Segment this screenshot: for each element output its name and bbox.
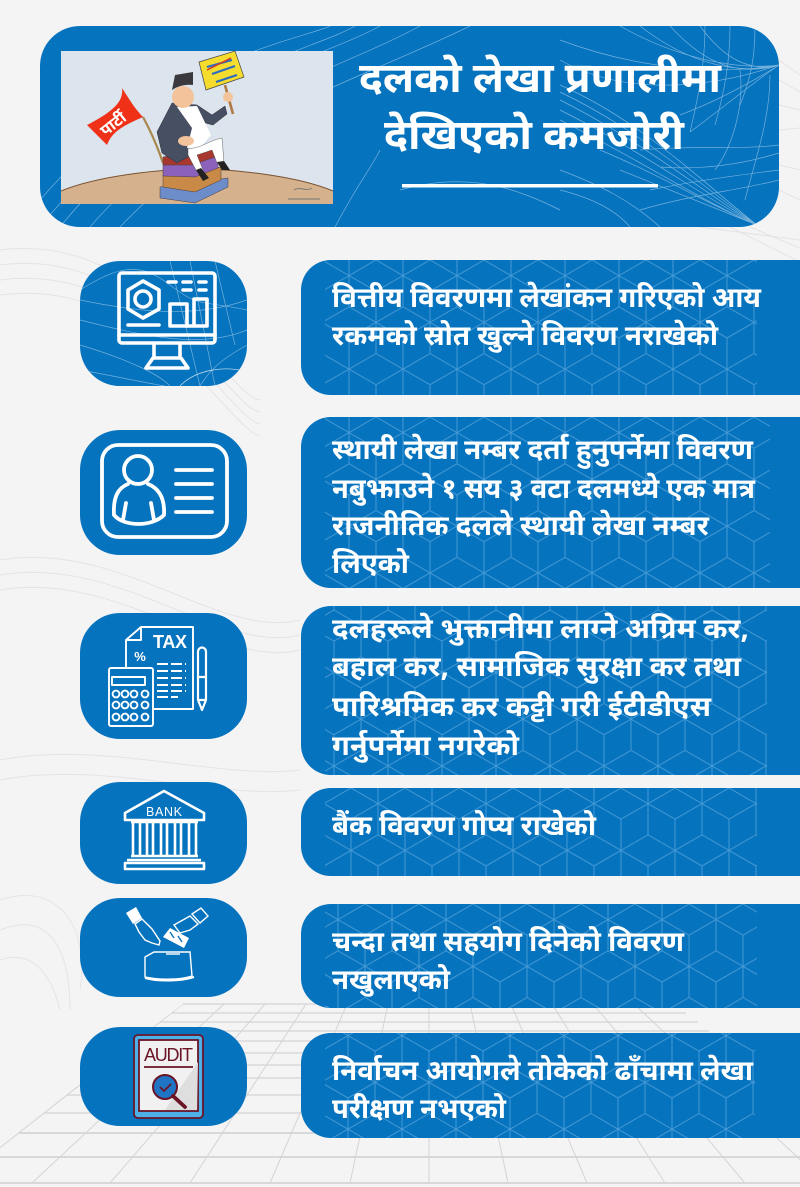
text panel 4: बैंक विवरण गोप्य राखेको (332, 808, 597, 847)
text panel 3: बहाल कर, सामाजिक सुरक्षा कर तथा (332, 650, 742, 688)
icon panel: bank (80, 782, 247, 884)
icon: tax form, calculator and pen (109, 627, 206, 726)
floor grid (0, 1004, 800, 1183)
text panel 5: नखुलाएको (332, 963, 451, 1001)
icon: audit report: AUDIT (144, 1045, 193, 1065)
text panel 6 (301, 1033, 800, 1138)
icon panel: monitor (80, 261, 247, 386)
text panel 2: राजनीतिक दलले स्थायी लेखा नम्बर (332, 508, 710, 547)
red flag: पार्टी (96, 107, 133, 142)
text panel 1: रकमको स्रोत खुल्ने विवरण नराखेको (332, 318, 719, 357)
icon panel: ID card (80, 430, 247, 555)
text panel 5 (301, 904, 800, 1008)
stack of books (160, 148, 228, 203)
icon: bank building (125, 791, 204, 869)
text panel 2: लिएको (332, 547, 410, 585)
text panel 2: स्थायी लेखा नम्बर दर्ता हुनुपर्नेमा विवरण (332, 432, 753, 471)
text panel 3: गर्नुपर्नेमा नगरेको (332, 728, 520, 767)
icon: ID card (102, 445, 227, 537)
text panel 2: नबुझाउने १ सय ३ वटा दलमध्ये एक मात्र (332, 471, 756, 510)
icon: tax form, calculator and pen: TAX (153, 632, 187, 652)
cartoon illustration (61, 51, 333, 204)
title: देखिएको कमजोरी (384, 111, 685, 167)
icon panel: audit (80, 1027, 247, 1126)
text panel 4 (301, 788, 800, 876)
text panel 3: दलहरूले भुक्तानीमा लाग्ने अग्रिम कर, (332, 611, 749, 650)
red flag (87, 88, 143, 145)
icon: monitor with chart (119, 273, 215, 368)
placard (199, 51, 244, 114)
text panel 3: पारिश्रमिक कर कट्टी गरी ईटीडीएस (332, 690, 712, 728)
title underline (402, 184, 658, 188)
text panel 6: परीक्षण नभएको (332, 1092, 507, 1130)
icon: audit report (134, 1035, 203, 1118)
text panel 1: वित्तीय विवरणमा लेखांकन गरिएको आय (332, 280, 762, 319)
text panel 5: चन्दा तथा सहयोग दिनेको विवरण (332, 924, 684, 963)
icon: hands dropping money in box (126, 907, 208, 981)
title (359, 54, 722, 167)
text panel 1 (301, 260, 800, 395)
ground (61, 169, 333, 204)
icon: bank building: BANK (146, 805, 183, 819)
header panel (40, 26, 779, 227)
text panel 6: निर्वाचन आयोगले तोकेको ढाँचामा लेखा (332, 1053, 754, 1092)
icon panel: tax (80, 613, 247, 739)
icon panel: donation box (80, 898, 247, 997)
text panel 3 (301, 606, 800, 775)
politician (157, 72, 230, 181)
icon: tax form, calculator and pen: % (134, 649, 146, 664)
artist signature (288, 188, 320, 199)
text panel 2 (301, 417, 800, 588)
title: दलको लेखा प्रणालीमा (359, 54, 722, 110)
flag pole (143, 117, 163, 163)
